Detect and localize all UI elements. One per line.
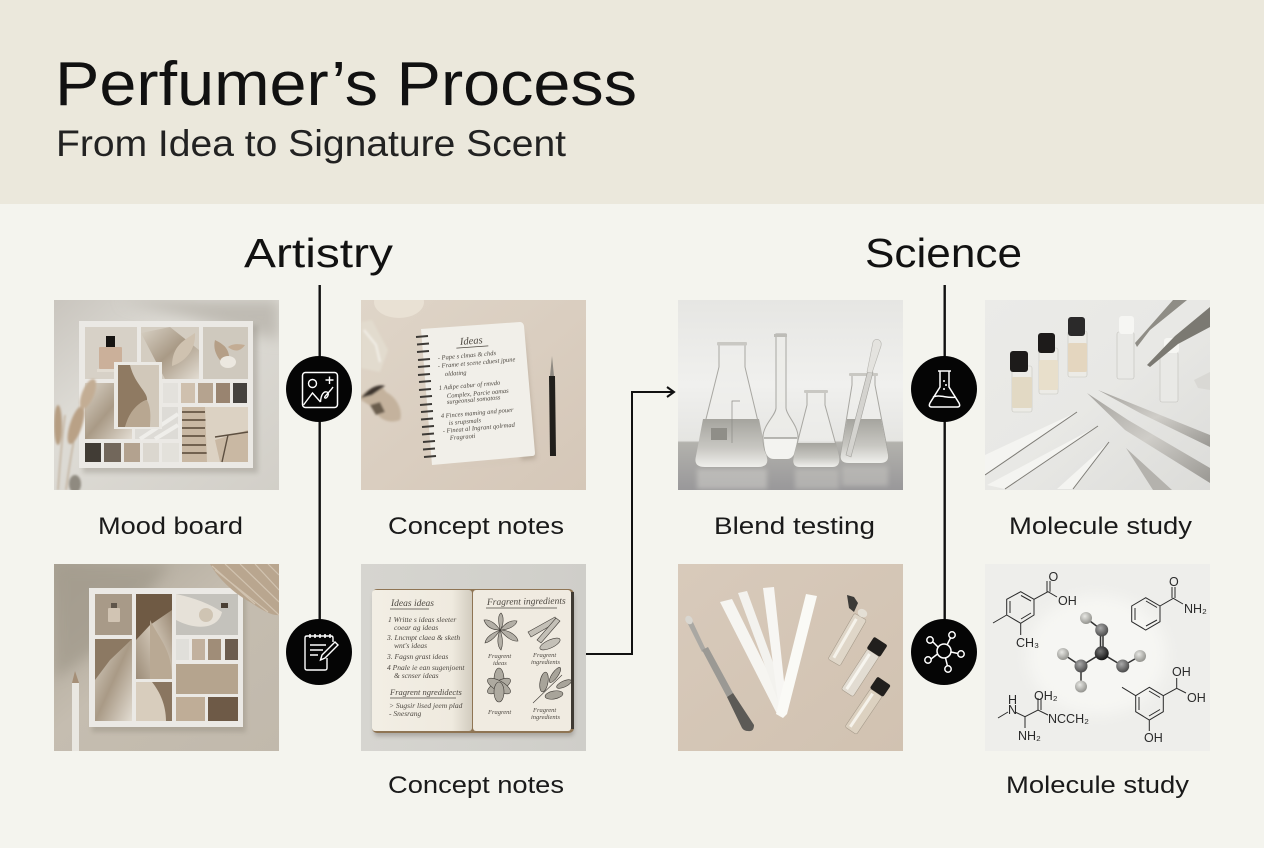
rose tile [176,594,238,635]
dish edge [1194,372,1210,390]
forceps top right [1135,300,1210,367]
structure: benzamide [1132,575,1207,630]
sketch: lily [487,668,511,702]
icon: notepad [286,619,352,685]
notebook: - Frame et scene cduest jpune [438,356,516,370]
right page notes: Fragrent ingredients [486,597,566,608]
dark silk tile [136,594,172,679]
panel: molecular structures [985,564,1210,751]
right page notes: ideas [493,660,507,667]
handwritten notes: Ideas [459,335,483,348]
marble tile [135,407,178,439]
sketch: leaf sprig [533,666,573,703]
right page notes [486,597,566,721]
panel: blotter strips and vials [678,564,903,751]
notebook [416,322,536,468]
amber vial 1 [1010,351,1032,412]
bottom swatches [85,443,179,462]
subtitle: From Idea to Signature Scent [56,123,567,164]
heading: Artistry: Artistry [244,230,394,276]
steel spatulas [1087,390,1210,490]
structure: dimethylbenzoic acid [993,570,1077,650]
spatula [684,614,754,731]
left page notes: coear ag ideas [394,623,438,632]
structure: methyl phenol diol [1122,665,1206,745]
glass bottle [362,328,386,370]
right page notes: ingredients [531,659,560,666]
icon: image [286,356,352,422]
notebook: - Pape s clmas & chds [438,350,497,362]
volumetric flask [763,334,798,459]
collage board [79,321,253,468]
panel: flasks [678,300,903,490]
structure: methyl phenol diol: OH [1172,665,1191,679]
title: Perfumer’s Process [55,50,637,119]
caption: Concept notes lower: Concept notes [388,772,564,799]
notebook: is srupsmals [449,417,482,427]
panel: mood board 1 [54,300,279,493]
centre silk tile [114,362,162,429]
heading: Science: Science [865,230,1022,276]
structure: methyl phenol diol: OH [1187,691,1206,705]
clear vial 1 [1117,316,1134,379]
right flask with pipette [840,339,888,463]
amber vial 2 [1038,333,1058,394]
leaf tile [203,327,248,379]
sand texture [176,664,238,694]
collage board [89,588,243,727]
structure: methyl phenol diol: OH [1144,731,1163,745]
structure: amino amide: H [1008,693,1017,707]
panel: open notebook [361,564,586,751]
left page notes: 3. Lncmpt claea & sketh [386,633,460,642]
left page notes: wnt's ideas [394,641,427,650]
notebook: 1 Adipe cabur of rmvdo [439,380,501,392]
clear vial 2 [1160,338,1179,402]
scent strips [720,587,817,718]
notebook: oldating [445,369,468,378]
pampas grass [54,377,100,493]
structure: amino amide [998,689,1089,743]
perfume tile [85,327,137,379]
striped fabric tile [182,407,248,462]
left page notes: - Snesrang [389,709,422,718]
right page notes: Fragrent [532,652,556,659]
palm fan [210,564,279,615]
left page notes: > Sugsir lised jeem plad [389,701,463,710]
small erlenmeyer flask [793,390,839,467]
sketch: cinnamon sticks [528,617,562,652]
spiral binding [416,336,436,457]
dish [374,300,424,318]
sketch: star flower [484,613,518,650]
erlenmeyer flask large [695,342,767,467]
pen [549,356,556,456]
structure: dimethylbenzoic acid: OH [1058,594,1077,608]
table reflections [697,466,888,489]
handwritten notes [456,337,488,348]
right page notes: Fragrent [532,707,556,714]
left fabric tile [85,383,132,439]
right page notes: Fragrent [487,653,511,660]
structure: amino amide: N [1008,703,1017,717]
bottle tile [95,594,132,635]
dark cap [847,595,858,612]
ball and stick molecule [1057,612,1146,692]
caption: Concept notes: Concept notes [388,513,564,540]
left page notes: 1 Writte s ideas sleeter [388,615,456,624]
structure: dimethylbenzoic acid: CH₃ [1016,636,1039,650]
bottom right swatch [208,697,238,721]
caption: Molecule study lower: Molecule study [1006,772,1189,799]
arrow: artistry to science [586,387,674,654]
structure: benzamide: O [1169,575,1179,589]
pipette [846,339,881,457]
artistry vertical line [318,285,321,625]
panel: mood board 2 [54,564,279,751]
left page notes: Ideas ideas [390,599,434,609]
open vial [828,606,871,666]
caption: Blend testing: Blend testing [714,513,875,540]
icon: flask [911,356,977,422]
left page notes: 3. Fagsn grast ideas [386,652,448,661]
right page notes: ingredients [531,714,560,721]
science vertical line [944,285,946,625]
shell [361,385,401,422]
swatches row [163,383,247,403]
book [372,589,574,733]
left page notes: Fragrent ngredidects [389,687,463,697]
notebook: 4 Finces maming and pouer [441,407,514,420]
left page notes [386,599,465,718]
bottom left swatch [176,697,205,721]
shoulder tile [136,682,172,721]
paper strips [985,412,1109,489]
notebook: Complex, Parcie oamas [447,388,509,400]
notebook: - Fineat al Ingrant qolrmad [443,422,516,435]
vial middle [840,637,888,697]
amber vial 3 [1068,317,1087,377]
header band [0,0,1264,204]
vial lower [844,676,891,735]
swatches [176,639,238,660]
structure: amino amide: OH₂ [1034,689,1058,703]
pencil [72,671,79,751]
draped fabric tile [95,639,132,721]
icon: molecule network [911,619,977,685]
left page notes: 4 Pnale ie ean sugenjoent [387,663,465,672]
structure: dimethylbenzoic acid: O [1048,570,1058,584]
caption: Mood board: Mood board [98,513,243,540]
panel: concept notes notebook [361,286,586,490]
notebook: surgeonsal somatoss [447,394,501,406]
panel: molecule study tools [985,300,1210,490]
notebook: Fragraoti [449,433,476,442]
left page notes: & scnser ideas [394,671,439,680]
silk tile [141,327,199,379]
right page notes: Fragrent [487,709,511,716]
caption: Molecule study: Molecule study [1009,513,1192,540]
structure: amino amide: NH₂ [1018,729,1041,743]
structure: amino amide: NCCH₂ [1048,712,1089,726]
structure: benzamide: NH₂ [1184,602,1207,616]
